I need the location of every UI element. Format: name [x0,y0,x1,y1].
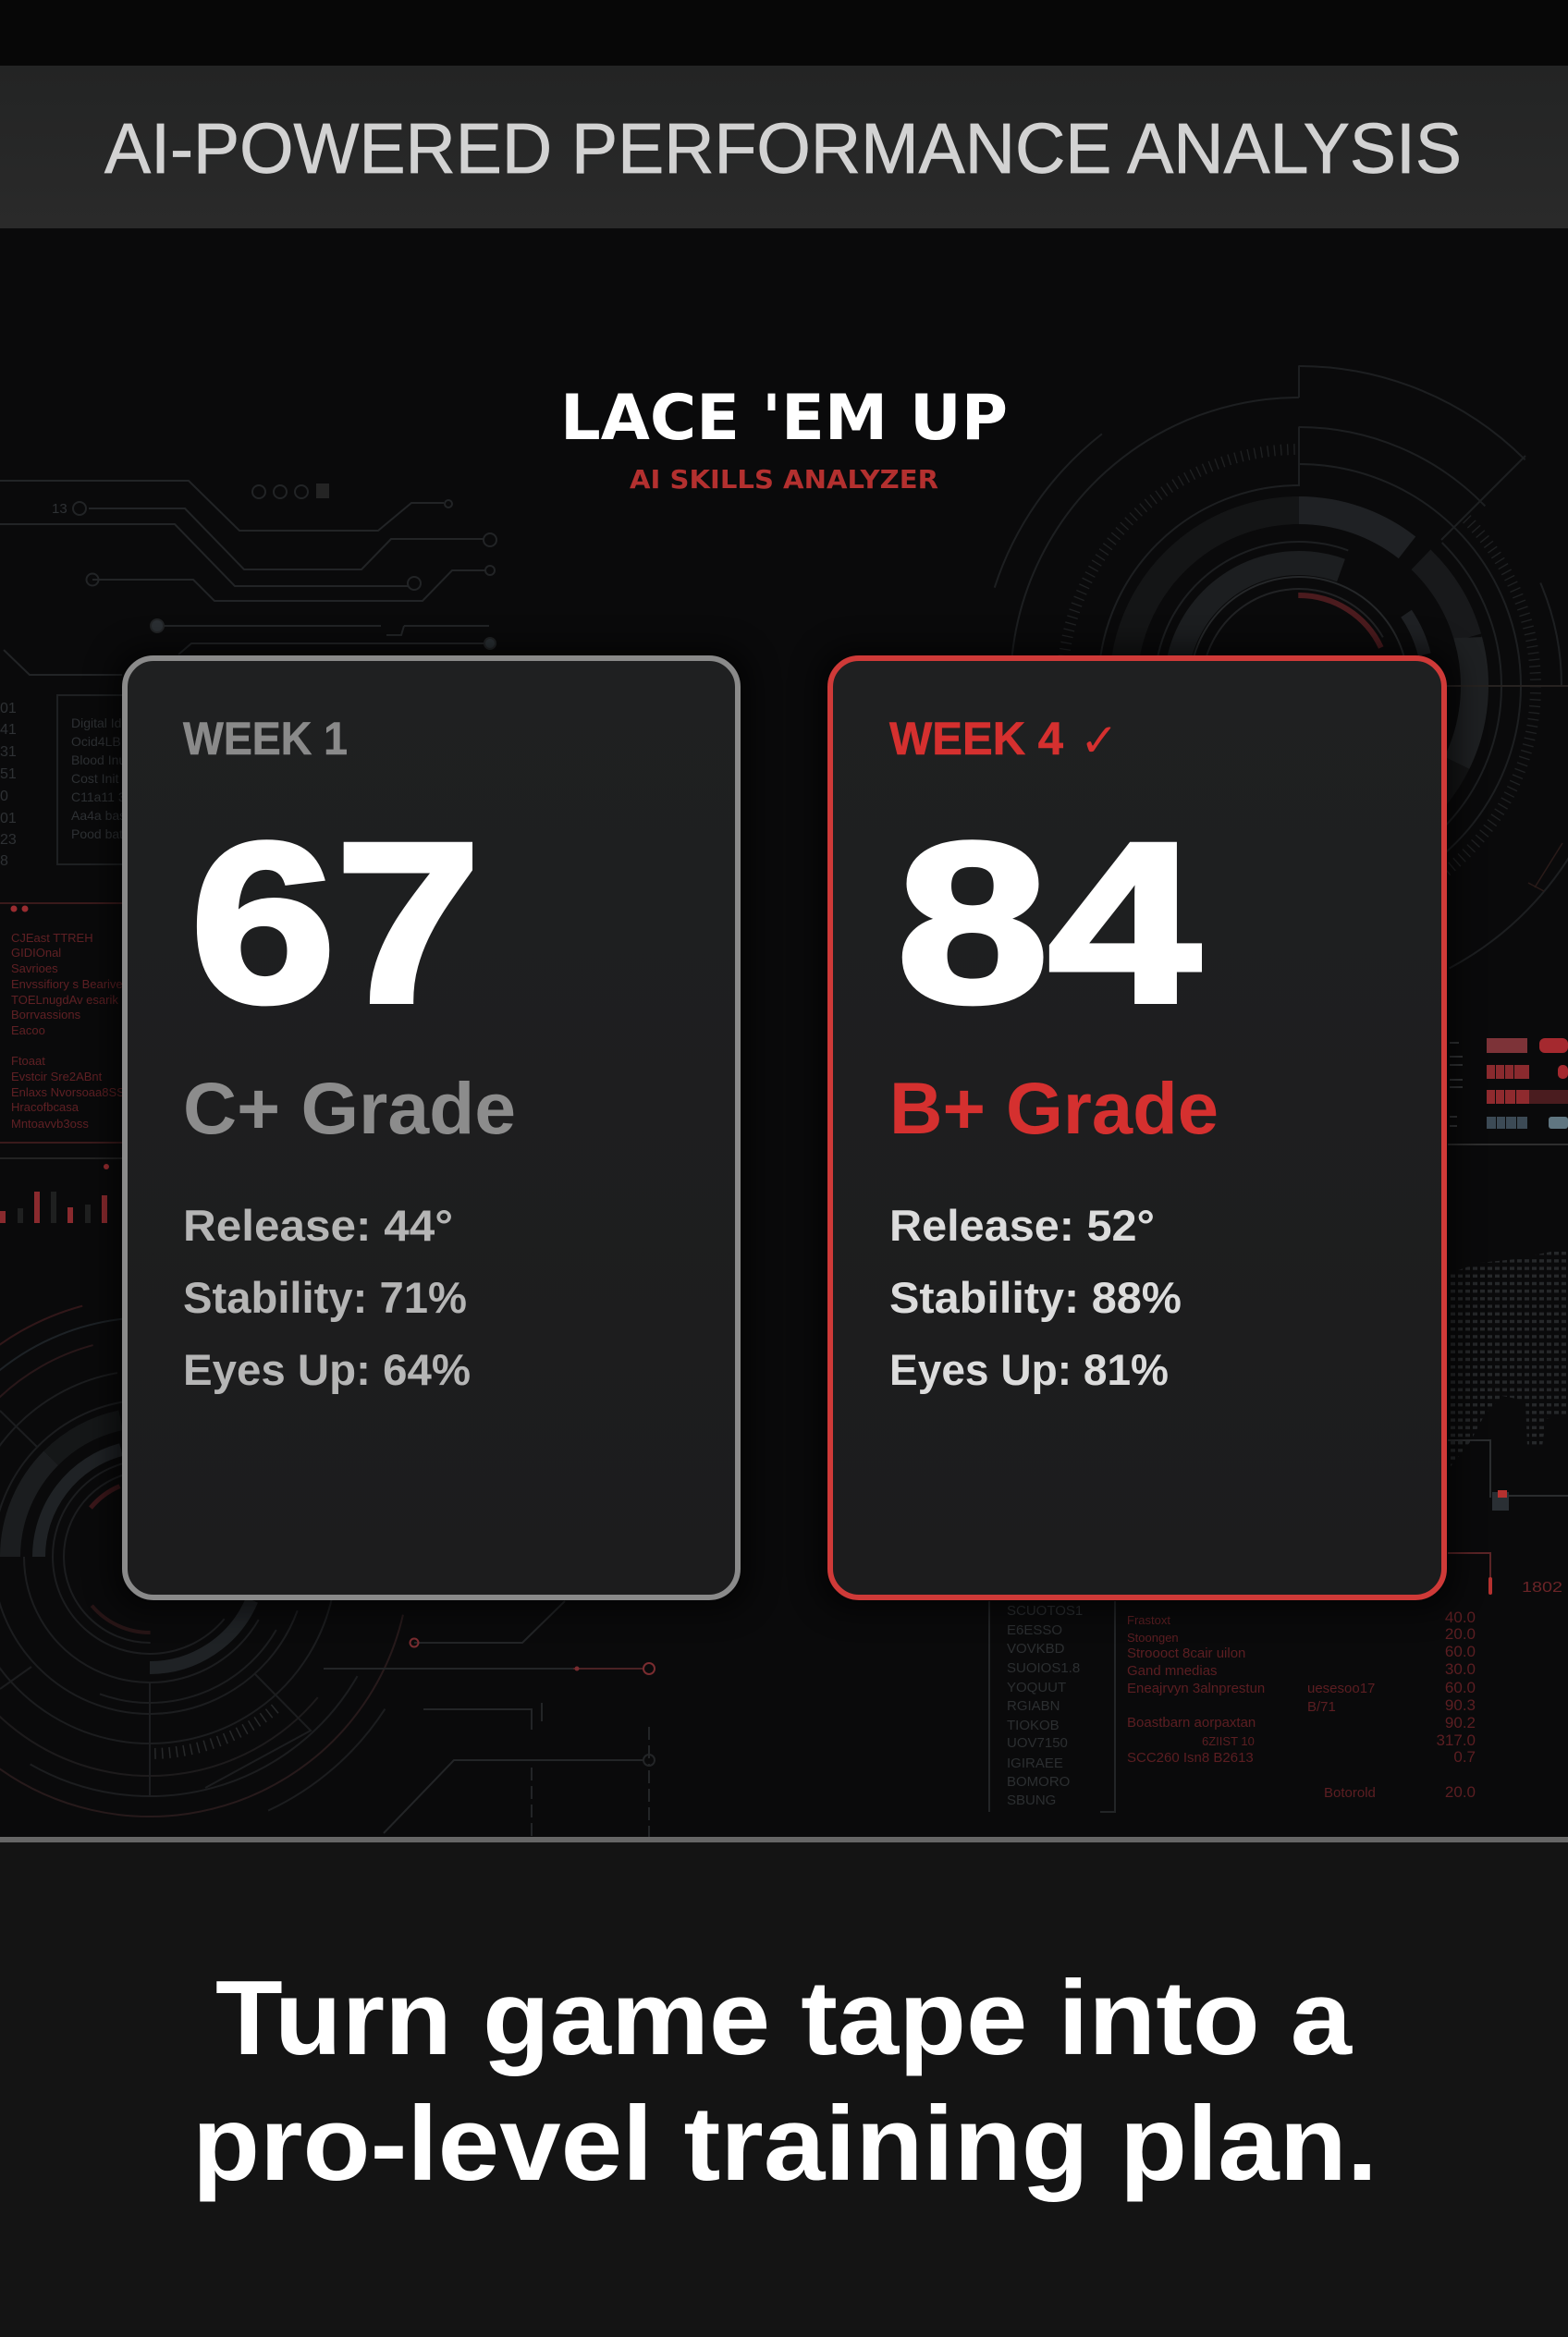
background HUD: red data table lower right: Botorold [1324,1785,1376,1801]
background HUD: red data table lower right: 40.0 [1445,1609,1476,1626]
background HUD: data box left: Pood bat [71,826,123,841]
background HUD: radial dial upper right [994,365,1568,969]
background HUD: red data table lower right: 60.0 [1445,1679,1476,1696]
brand title: LACE 'EM UP [560,382,1008,455]
background HUD: red data table lower right: 90.3 [1445,1696,1476,1714]
background HUD: red data table lower right: 0.7 [1453,1748,1476,1766]
background HUD: red data table lower right: 317.0 [1436,1731,1476,1749]
background HUD: data box left: 8 [0,853,8,869]
background HUD: data box left: Ocid4LB [71,734,121,749]
background HUD: red data table lower right: SCC260 Isn8 B2613 [1127,1750,1254,1766]
background HUD: red data panel and mini bars left: Savrioes [11,961,58,975]
background HUD: gray code column lower right: YOQUUT [1007,1680,1066,1695]
background HUD: data box left: Aa4a bas [71,808,126,823]
week 4 score: 84 [897,796,1200,1050]
tagline line 2: pro-level training plan. [192,2086,1378,2203]
background HUD: red data table lower right: uesesoo17 [1307,1681,1375,1696]
background HUD: red data panel and mini bars left: Mntoavvb3oss [11,1117,89,1131]
background HUD: red data table lower right: Stoongen [1127,1631,1179,1645]
background HUD: gray code column lower right: IGIRAEE [1007,1756,1063,1771]
background HUD: red data panel and mini bars left: Enlaxs Nvorsoaa8SS [11,1085,125,1099]
week 1 release stat: Release: 44° [183,1201,453,1250]
background HUD: data box left: 41 [0,722,17,738]
background HUD: gray code column lower right [989,1601,1115,1812]
card shadows [113,647,1456,1610]
panel: week 1 card [125,658,738,1597]
background HUD: gray code column lower right: SBUNG [1007,1793,1056,1808]
brand subtitle: AI SKILLS ANALYZER [630,464,938,495]
background HUD: red data table lower right: 20.0 [1445,1783,1476,1801]
week 4 label: WEEK 4 [889,713,1063,765]
background HUD: gray code column lower right: SUOIOS1.8 [1007,1660,1080,1676]
background HUD: red data panel and mini bars left: Evstcir Sre2ABnt [11,1070,103,1083]
background HUD: data box left: Digital Id3 [71,716,129,730]
week 4 grade: B+ Grade [889,1067,1219,1149]
background HUD: red data table lower right: 90.2 [1445,1714,1476,1731]
background HUD: data box left: Cost Init [71,771,118,786]
week 4 release stat: Release: 52° [889,1201,1155,1250]
background HUD: circuit traces lower centre [324,1601,655,1837]
week 1 score: 67 [190,796,481,1050]
background HUD: data box left: 31 [0,744,17,760]
background HUD: red data table lower right: B/71 [1307,1699,1336,1715]
background HUD: right connector lines: 1802 [1522,1580,1562,1596]
background HUD: right connector lines [1448,1440,1568,1596]
background HUD: red data panel and mini bars left [0,903,156,1223]
background HUD: data box left: Blood Inu [71,752,126,767]
background HUD: red data panel and mini bars left: Ftoaat [11,1054,45,1068]
background HUD: data box left: C11a11 3 [71,789,126,804]
panel: week 4 card [830,658,1444,1597]
background HUD: data box left: 01 [0,811,17,826]
background HUD: data box left [0,501,131,869]
background HUD: red data table lower right [1127,1609,1476,1801]
top strip [0,0,1568,66]
background HUD: red data table lower right: Frastoxt [1127,1613,1170,1627]
header bar [0,66,1568,228]
background HUD: gray code column lower right: TIOKOB [1007,1718,1060,1733]
background HUD: data box left: 01 [0,701,17,716]
background HUD: gray code column lower right: BOMORO [1007,1774,1070,1790]
background HUD: red data table lower right: 60.0 [1445,1643,1476,1660]
background HUD: red data table lower right: 20.0 [1445,1625,1476,1643]
background HUD: data box left: 23 [0,832,17,848]
background HUD: gray code column lower right: UOV7150 [1007,1735,1068,1751]
week 1 eyes up stat: Eyes Up: 64% [183,1345,471,1394]
background HUD: gray code column lower right: VOVKBD [1007,1641,1065,1657]
background HUD: red data table lower right: Boastbarn aorpaxtan [1127,1715,1256,1731]
background HUD: red data panel and mini bars left: Eacoo [11,1023,45,1037]
background HUD: gray code column lower right: E6ESSO [1007,1622,1062,1638]
tagline line 1: Turn game tape into a [215,1960,1354,2077]
background HUD: red data table lower right: Eneajrvyn 3alnprestun [1127,1681,1265,1696]
background HUD: right bar readout [1448,1038,1568,1144]
week 1 stability stat: Stability: 71% [183,1273,467,1322]
icon: check mark: ✓ [1080,714,1119,767]
background HUD: gray code column lower right: SCUOTOS1 [1007,1603,1083,1619]
week 1 label: WEEK 1 [183,713,348,765]
background HUD: red data panel and mini bars left: GIDIOnal [11,946,61,960]
background HUD: red data panel and mini bars left: TOELnugdAv esarik Eacos [11,993,155,1007]
background HUD: data box left: 0 [0,789,8,804]
background HUD: red data table lower right: 6ZIIST 10 [1202,1734,1255,1748]
background HUD: red data table lower right: Stroooct 8cair uilon [1127,1646,1245,1661]
background HUD: data box left: 51 [0,766,17,782]
bottom tagline panel [0,1837,1568,2337]
background HUD: red data table lower right: Gand mnedias [1127,1663,1218,1679]
week 4 eyes up stat: Eyes Up: 81% [889,1345,1169,1394]
week 1 grade: C+ Grade [183,1067,516,1149]
background HUD: red data table lower right: 30.0 [1445,1660,1476,1678]
background HUD: red data panel and mini bars left: Borrvassions [11,1008,81,1022]
background HUD: dot-matrix map [1448,1248,1568,1470]
background HUD: red data panel and mini bars left: CJEast TTREH [11,931,93,945]
background HUD: red data panel and mini bars left: Hracofbcasa [11,1100,80,1114]
header title: AI-POWERED PERFORMANCE ANALYSIS [104,109,1462,189]
background HUD: red data panel and mini bars left: Envssifiory s Bearive cr3an [11,977,156,991]
background HUD: radial dial lower left [0,1305,404,1817]
background HUD: gray code column lower right: RGIABN [1007,1698,1060,1714]
background HUD: data box left: 13 [52,501,67,517]
background HUD: circuit traces upper left [0,481,496,675]
week 4 stability stat: Stability: 88% [889,1273,1182,1322]
